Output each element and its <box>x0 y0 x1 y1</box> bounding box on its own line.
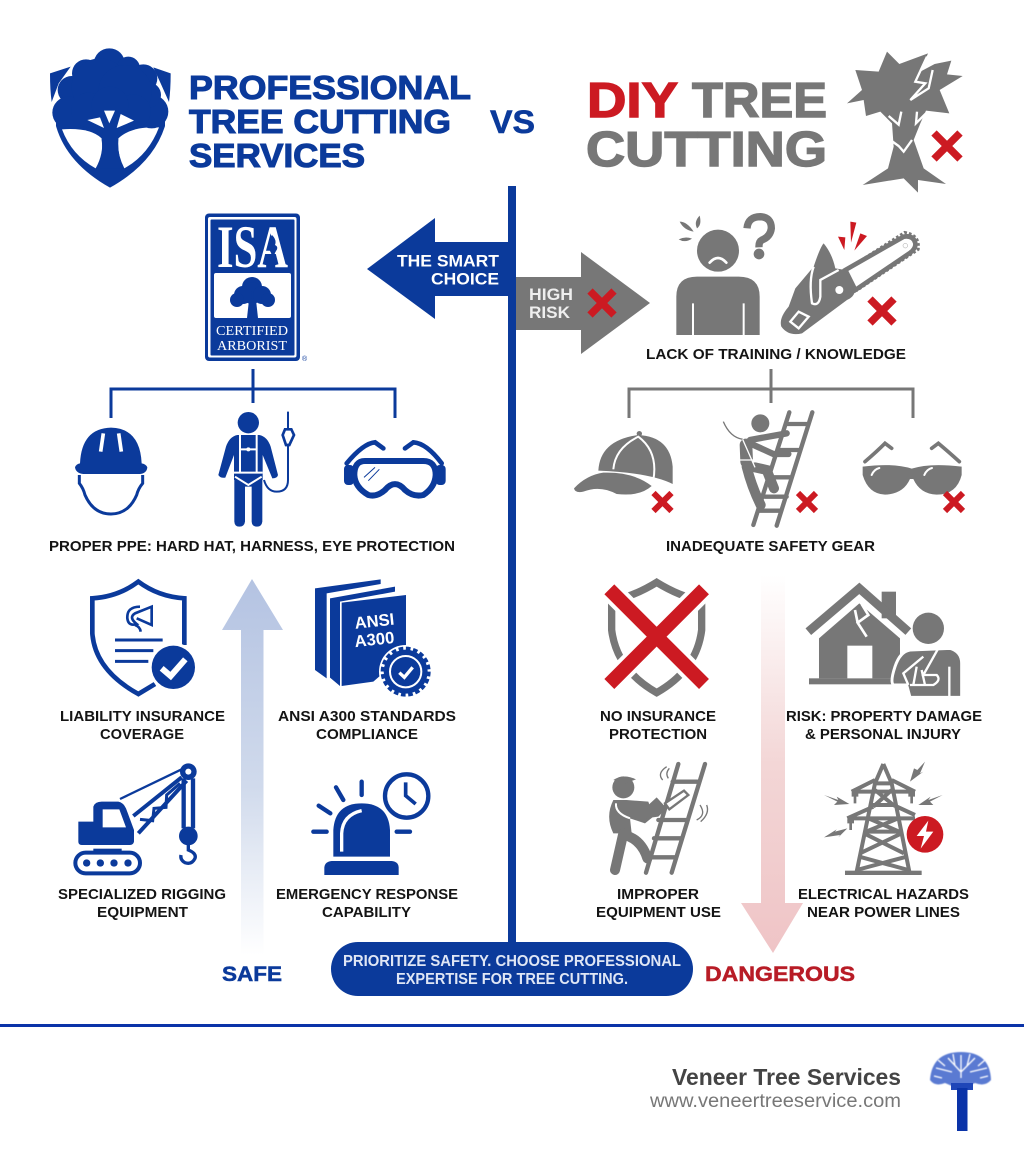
footer website: www.veneertreeservice.com <box>649 1091 901 1112</box>
label: inadequate safety gear: INADEQUATE SAFETY GEAR <box>666 538 875 555</box>
arrow: high risk: HIGH <box>529 285 573 304</box>
arrow: the smart choice <box>367 218 509 319</box>
label: dangerous: DANGEROUS <box>705 963 855 986</box>
icon: chainsaw <box>781 222 918 334</box>
icon: footer tree logo <box>930 1052 991 1131</box>
title: professional tree cutting services: PROFESSIONAL <box>189 69 471 106</box>
label: ANSI A300 standards compliance: COMPLIANCE <box>316 726 418 743</box>
callout: prioritize safety: EXPERTISE FOR TREE CUTTING. <box>396 971 628 988</box>
arrow: safe gradient <box>222 579 283 955</box>
label: property damage and injury <box>786 708 982 743</box>
label: no insurance protection <box>600 708 716 743</box>
red cross under chainsaw <box>870 299 894 323</box>
arrow: dangerous gradient <box>741 575 803 953</box>
panel: DIY header <box>586 52 963 193</box>
label: specialized rigging equipment <box>58 886 226 921</box>
badge: ISA certified arborist: ® <box>302 355 308 363</box>
arrow: the smart choice: THE SMART <box>397 252 500 270</box>
icon: crane <box>75 763 198 873</box>
panel: professional header <box>50 48 471 188</box>
label: electrical hazards: ELECTRICAL HAZARDS <box>798 886 969 903</box>
vs label: VS <box>490 104 535 140</box>
badge: ISA certified arborist: CERTIFIED <box>216 324 288 339</box>
footer company name: Veneer Tree Services <box>672 1064 901 1090</box>
label: no insurance protection: NO INSURANCE <box>600 708 716 725</box>
title: DIY tree cutting <box>586 74 827 177</box>
label: emergency response capability: EMERGENCY RESPONSE <box>276 886 458 903</box>
icon: confused person <box>676 216 771 335</box>
label: safe: SAFE <box>222 963 282 986</box>
label: electrical hazards <box>798 886 969 921</box>
connector: PPE branches <box>111 369 395 418</box>
label: property damage and injury: RISK: PROPERTY DAMAGE <box>786 708 982 725</box>
icon: sunglasses <box>863 443 962 495</box>
label: specialized rigging equipment: SPECIALIZED RIGGING <box>58 886 226 903</box>
title: professional tree cutting services <box>189 69 471 174</box>
label: liability insurance coverage <box>60 708 225 743</box>
label: no insurance protection: PROTECTION <box>609 726 707 743</box>
gear icons <box>574 412 962 526</box>
badge: ISA certified arborist <box>205 214 308 363</box>
icon: safety harness <box>218 412 294 527</box>
badge: ISA certified arborist: ARBORIST <box>217 339 287 354</box>
icon: worker misusing chainsaw on ladder <box>609 764 708 873</box>
label: electrical hazards: NEAR POWER LINES <box>807 904 960 921</box>
footer: brand <box>649 1052 991 1131</box>
arrow: high risk <box>516 252 650 354</box>
icon: broken tree <box>847 52 963 193</box>
callout: prioritize safety: PRIORITIZE SAFETY. CHOOSE PROFESSIONAL <box>343 953 681 970</box>
arrow: high risk: RISK <box>529 303 571 322</box>
title: professional tree cutting services: TREE CUTTING <box>189 103 451 140</box>
label: liability insurance coverage: LIABILITY INSURANCE <box>60 708 225 725</box>
icon: crossed out shield <box>609 582 704 693</box>
badge: ISA certified arborist: ISA <box>217 214 288 280</box>
label: lack of training: LACK OF TRAINING / KNOWLEDGE <box>646 346 906 363</box>
label: proper PPE: PROPER PPE: HARD HAT, HARNESS, EYE PROTECTION <box>49 538 455 555</box>
label: improper equipment use: IMPROPER <box>617 886 699 903</box>
title: DIY tree cutting: CUTTING <box>586 123 827 177</box>
icon: damaged house and injured person <box>808 588 962 697</box>
label: improper equipment use: EQUIPMENT USE <box>596 904 721 921</box>
label: liability insurance coverage: COVERAGE <box>100 726 184 743</box>
icon: ANSI A300 books: ANSI <box>354 610 395 633</box>
icon: emergency beacon and clock <box>313 774 428 875</box>
title: DIY tree cutting: TREE <box>692 74 827 128</box>
icon: hard hat <box>75 428 147 514</box>
icon: ANSI A300 books <box>315 579 432 698</box>
center divider <box>508 186 516 946</box>
label: improper equipment use <box>596 886 721 921</box>
icon: tree shield <box>50 48 171 188</box>
panel: professional column <box>49 214 458 986</box>
label: specialized rigging equipment: EQUIPMENT <box>97 904 188 921</box>
icon: baseball cap <box>574 431 673 495</box>
panel: DIY column <box>574 216 982 986</box>
title: DIY tree cutting: DIY <box>587 74 678 128</box>
icon: power line tower with hazard <box>824 762 943 875</box>
label: emergency response capability: CAPABILITY <box>322 904 411 921</box>
label: ANSI A300 standards compliance: ANSI A300 STANDARDS <box>278 708 456 725</box>
label: property damage and injury: & PERSONAL INJURY <box>805 726 961 743</box>
icon: safety goggles <box>344 442 446 496</box>
icon: red cross <box>934 133 960 159</box>
footer rule <box>0 1024 1024 1027</box>
icon: climber on ladder <box>723 412 812 526</box>
icon: ANSI A300 books: A300 <box>354 628 395 651</box>
title: professional tree cutting services: SERVICES <box>189 137 365 174</box>
label: ANSI A300 standards compliance <box>278 708 456 743</box>
icon: liability insurance shield <box>92 582 198 694</box>
callout: prioritize safety <box>331 942 693 996</box>
red crosses on gear <box>654 493 963 511</box>
connector: safety gear branches <box>629 369 913 418</box>
label: emergency response capability <box>276 886 458 921</box>
PPE icons <box>75 412 446 527</box>
arrow: the smart choice: CHOICE <box>431 270 499 288</box>
